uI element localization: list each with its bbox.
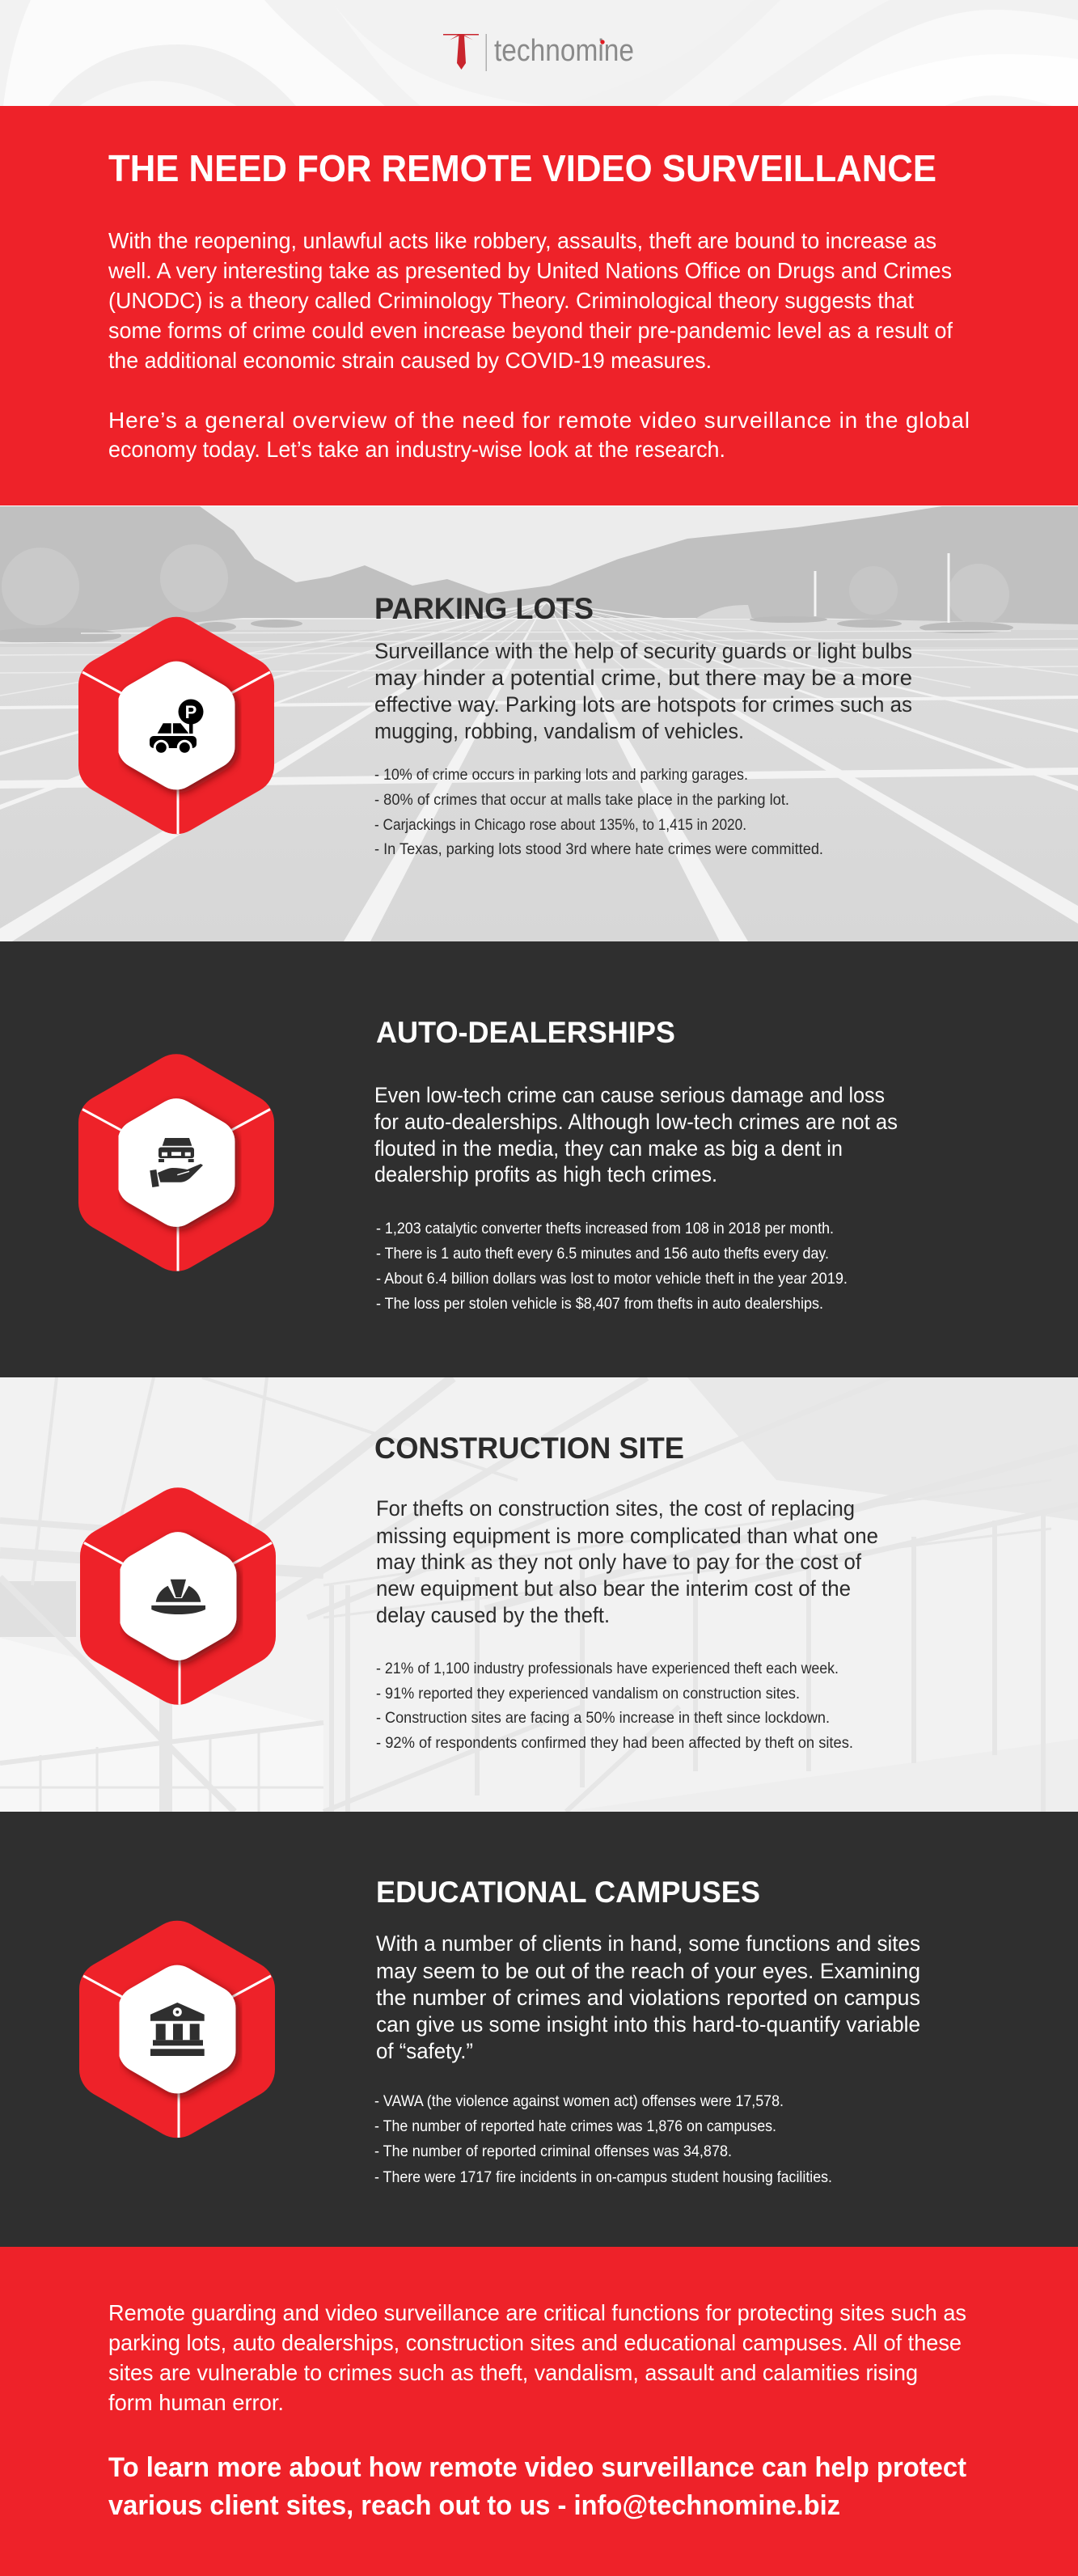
stats list: construction site: - Construction sites are facing a 50% increase in theft since lockdown.	[376, 1710, 830, 1727]
heading: educational campuses: EDUCATIONAL CAMPUSES	[376, 1876, 760, 1909]
stats list: parking lots	[374, 767, 823, 858]
body text: construction site: missing equipment is more complicated than what one	[376, 1524, 878, 1548]
intro paragraph: the additional economic strain caused by COVID-19 measures.	[108, 348, 712, 373]
body text: auto-dealerships: dealership profits as high tech crimes.	[374, 1162, 717, 1186]
body text: educational campuses: the number of crimes and violations reported on campus	[376, 1986, 920, 2010]
call to action: various client sites, reach out to us - info@technomine.biz	[108, 2490, 840, 2521]
stats list: auto-dealerships: - About 6.4 billion dollars was lost to motor vehicle theft in the year 2019.	[376, 1271, 848, 1288]
stats list: educational campuses	[374, 2093, 832, 2186]
panel: parking lots	[0, 506, 1078, 941]
stats list: auto-dealerships: - There is 1 auto theft every 6.5 minutes and 156 auto thefts every day.	[376, 1246, 829, 1263]
icon: campus hexagon	[83, 1949, 271, 2138]
body text: educational campuses	[376, 1931, 920, 2063]
closing paragraph: sites are vulnerable to crimes such as theft, vandalism, assault and calamities rising	[108, 2360, 918, 2385]
closing paragraph	[108, 2300, 966, 2415]
closing paragraph: form human error.	[108, 2390, 284, 2415]
photo background: parking lot	[0, 506, 1078, 941]
stats list: educational campuses: - VAWA (the violence against women act) offenses were 17,578.	[374, 2093, 784, 2110]
icon: car with parking sign	[150, 699, 204, 755]
body text: educational campuses: may seem to be out of the reach of your eyes. Examining	[376, 1959, 920, 1983]
stats list: construction site: - 92% of respondents confirmed they had been affected by theft on sites.	[376, 1735, 853, 1752]
body text: parking lots	[374, 639, 912, 743]
body text: parking lots: mugging, robbing, vandalism of vehicles.	[374, 719, 744, 743]
panel: educational campuses	[0, 1812, 1078, 2248]
body text: construction site: For thefts on construction sites, the cost of replacing	[376, 1496, 855, 1521]
body text: educational campuses: With a number of clients in hand, some functions and sites	[376, 1931, 920, 1956]
icon: car with parking sign: P	[185, 702, 197, 722]
body text: construction site: new equipment but also bear the interim cost of the	[376, 1576, 851, 1601]
stats list: educational campuses: - There were 1717 fire incidents in on-campus student housing facilities.	[374, 2169, 832, 2186]
call to action	[108, 2452, 966, 2521]
overview paragraph: economy today. Let’s take an industry-wise look at the research.	[108, 437, 725, 462]
intro panel	[0, 106, 1078, 505]
stats list: parking lots: - Carjackings in Chicago rose about 135%, to 1,415 in 2020.	[374, 817, 746, 834]
icon: car on open hand	[150, 1138, 203, 1187]
body text: parking lots: Surveillance with the help of security guards or light bulbs	[374, 639, 912, 663]
heading: parking lots: PARKING LOTS	[374, 592, 594, 625]
icon: construction hexagon	[84, 1516, 272, 1705]
stats list: auto-dealerships: - The loss per stolen vehicle is $8,407 from thefts in auto dealerships.	[376, 1296, 823, 1313]
body text: auto-dealerships: for auto-dealerships. Although low-tech crimes are not as	[374, 1110, 898, 1134]
panel: auto-dealerships	[0, 941, 1078, 1377]
logo	[443, 34, 634, 71]
body text: auto-dealerships	[374, 1083, 898, 1186]
header band	[0, 0, 1078, 106]
title: THE NEED FOR REMOTE VIDEO SURVEILLANCE	[108, 147, 936, 189]
stats list: educational campuses: - The number of reported criminal offenses was 34,878.	[374, 2143, 732, 2160]
icon: parking hexagon	[82, 645, 270, 834]
body text: auto-dealerships: flouted in the media, they can make as big a dent in	[374, 1136, 843, 1161]
stats list: parking lots: - 10% of crime occurs in parking lots and parking garages.	[374, 767, 748, 784]
overview paragraph	[108, 408, 970, 462]
panel: construction site	[0, 1377, 1078, 1812]
body text: educational campuses: of “safety.”	[376, 2039, 473, 2063]
stats list: construction site: - 91% reported they experienced vandalism on construction sites.	[376, 1686, 800, 1703]
body text: educational campuses: can give us some insight into this hard-to-quantify variable	[376, 2012, 920, 2037]
stats list: construction site	[376, 1660, 853, 1752]
stats list: parking lots: - 80% of crimes that occur at malls take place in the parking lot.	[374, 792, 789, 809]
intro paragraph: With the reopening, unlawful acts like robbery, assaults, theft are bound to increase as	[108, 228, 936, 253]
heading: construction site: CONSTRUCTION SITE	[374, 1432, 684, 1465]
heading: auto-dealerships: AUTO-DEALERSHIPS	[376, 1016, 675, 1049]
body text: parking lots: may hinder a potential crime, but there may be a more	[374, 666, 912, 690]
body text: auto-dealerships: Even low-tech crime can cause serious damage and loss	[374, 1083, 885, 1107]
body text: construction site: delay caused by the theft.	[376, 1603, 610, 1627]
photo background: timber framing	[0, 1377, 1078, 1812]
icon: auto-dealership hexagon	[82, 1082, 270, 1271]
call to action: To learn more about how remote video surveillance can help protect	[108, 2452, 966, 2483]
stats list: auto-dealerships: - 1,203 catalytic converter thefts increased from 108 in 2018 per month.	[376, 1220, 834, 1237]
closing paragraph: Remote guarding and video surveillance are critical functions for protecting sites such as	[108, 2300, 966, 2325]
stats list: educational campuses: - The number of reported hate crimes was 1,876 on campuses.	[374, 2118, 776, 2135]
intro paragraph: (UNODC) is a theory called Criminology Theory. Criminological theory suggests that	[108, 288, 914, 313]
intro paragraph: well. A very interesting take as presented by United Nations Office on Drugs and Crimes	[108, 258, 952, 283]
stats list: auto-dealerships	[376, 1220, 848, 1313]
body text: construction site: may think as they not only have to pay for the cost of	[376, 1550, 862, 1574]
stats list: parking lots: - In Texas, parking lots stood 3rd where hate crimes were committed.	[374, 841, 823, 858]
intro paragraph: some forms of crime could even increase beyond their pre-pandemic level as a result of	[108, 318, 953, 343]
closing paragraph: parking lots, auto dealerships, construction sites and educational campuses. All of these	[108, 2330, 962, 2355]
icon: university building	[150, 2003, 205, 2056]
overview paragraph: Here’s a general overview of the need for remote video surveillance in the global	[108, 408, 970, 433]
panel: conclusion	[0, 2247, 1078, 2576]
icon: hard hat	[151, 1577, 205, 1614]
logo: technomine	[494, 34, 634, 68]
stats list: construction site: - 21% of 1,100 industry professionals have experienced theft each week.	[376, 1660, 839, 1677]
body text: parking lots: effective way. Parking lots are hotspots for crimes such as	[374, 692, 912, 717]
body text: construction site	[376, 1496, 878, 1627]
intro paragraph	[108, 228, 953, 373]
